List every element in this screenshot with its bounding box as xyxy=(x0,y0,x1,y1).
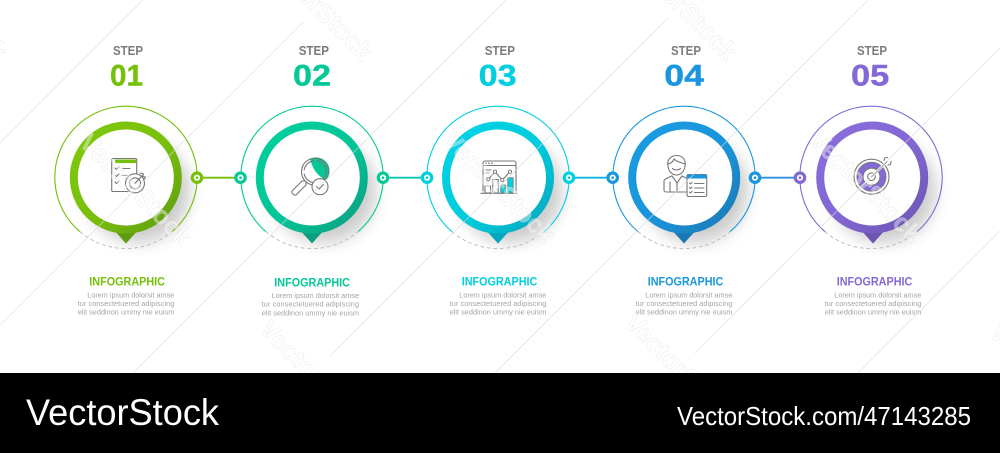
step 2 outer arc xyxy=(241,106,383,232)
step 4 dashed arc xyxy=(638,232,730,249)
step 5 number: 05 xyxy=(851,60,889,92)
step 2 number: 02 xyxy=(293,60,331,92)
step 3 outer arc xyxy=(427,106,569,232)
step 4 body text: tur consectetuered adipiscing xyxy=(636,299,732,308)
step 5 label: STEP xyxy=(857,43,887,58)
step 2 body text: tur consectetuered adipiscing xyxy=(262,300,359,309)
icon: target with arrow xyxy=(854,158,891,194)
step 4 pointer xyxy=(671,229,697,244)
footer band xyxy=(0,373,1000,453)
step 2 disc xyxy=(260,126,364,230)
step 3 pointer xyxy=(485,229,511,244)
step 2 pointer xyxy=(299,229,325,244)
footer logo text: VectorStock xyxy=(26,392,219,433)
panel: step 1 xyxy=(55,43,197,317)
step 3 disc xyxy=(446,126,550,230)
step 3 body text: Lorem ipsum dolorsit amse xyxy=(459,290,546,300)
step 5 shadow xyxy=(832,139,936,243)
step 4 outer arc xyxy=(613,106,755,232)
step 1 label: STEP xyxy=(113,43,143,58)
step 3 dashed arc xyxy=(452,232,544,249)
step 1 heading: INFOGRAPHIC xyxy=(89,277,165,289)
step 4 label: STEP xyxy=(671,43,701,58)
step 2 body text xyxy=(262,291,359,317)
step 5 dashed arc xyxy=(825,232,917,249)
watermark text: VectorStock xyxy=(619,307,744,432)
step 3 body text: tur consectetuered adipiscing xyxy=(450,299,546,308)
step 2 shadow xyxy=(272,139,376,243)
step 5 body text: elit seddinon ummy nie euism xyxy=(825,308,921,317)
step 2 body text: Lorem ipsum dolorsit amse xyxy=(272,291,359,300)
step 3 heading: INFOGRAPHIC xyxy=(462,277,537,289)
step 1 body text: Lorem ipsum dolorsit amse xyxy=(87,290,174,300)
step 4 number: 04 xyxy=(664,60,704,92)
step 4 body text: Lorem ipsum dolorsit amse xyxy=(645,290,732,300)
step 1 number: 01 xyxy=(110,60,143,92)
step 3 body text: elit seddinon ummy nie euism xyxy=(450,308,546,317)
step 5 body text xyxy=(825,290,921,317)
panel: step 5 xyxy=(800,43,942,317)
step 4 heading: INFOGRAPHIC xyxy=(648,277,723,289)
icon: businessman with checklist xyxy=(664,156,707,196)
connector: 3 to 4 xyxy=(564,173,617,182)
step 1 disc xyxy=(74,126,178,230)
step 3 body text xyxy=(450,290,546,317)
step 5 disc xyxy=(820,126,924,230)
connector: 1 to 2 xyxy=(192,173,245,182)
step 3 label: STEP xyxy=(485,43,515,58)
step 3 shadow xyxy=(458,139,562,243)
icon: magnifier with check xyxy=(292,157,330,195)
icon: analytics window xyxy=(481,161,517,193)
connector: 4 to 5 xyxy=(750,173,805,182)
step 2 label: STEP xyxy=(299,43,329,58)
step 4 body text: elit seddinon ummy nie euism xyxy=(636,308,732,317)
footer url text: VectorStock.com/47143285 xyxy=(677,401,971,431)
watermark text: VectorStock xyxy=(804,124,929,249)
watermark text: VectorStock xyxy=(74,127,199,252)
panel: step 4 xyxy=(613,43,755,317)
watermark text: VectorStock xyxy=(254,314,379,439)
step 5 pointer xyxy=(860,229,886,244)
step 4 shadow xyxy=(644,139,748,243)
step 5 body text: tur consectetuered adipiscing xyxy=(825,299,921,308)
connector: 2 to 3 xyxy=(378,173,432,182)
step 1 shadow xyxy=(86,139,190,243)
step 1 pointer xyxy=(113,229,139,244)
step 4 body text xyxy=(636,290,732,317)
step 1 body text: elit seddinon ummy nie euism xyxy=(78,308,174,317)
icon: checklist and target xyxy=(112,158,146,193)
step 1 outer arc xyxy=(55,106,197,232)
panel: step 2 xyxy=(241,43,383,317)
panel: step 3 xyxy=(427,43,569,317)
step 1 dashed arc xyxy=(80,232,172,249)
step 1 body text: tur consectetuered adipiscing xyxy=(78,299,174,308)
step 5 outer arc xyxy=(800,106,942,232)
step 2 dashed arc xyxy=(266,232,358,249)
step 3 number: 03 xyxy=(479,60,517,92)
step 5 heading: INFOGRAPHIC xyxy=(837,277,912,289)
step 5 body text: Lorem ipsum dolorsit amse xyxy=(834,290,921,300)
step 2 heading: INFOGRAPHIC xyxy=(274,277,350,289)
step 2 body text: elit seddinon ummy nie euism xyxy=(262,308,359,317)
watermark text: VectorStock xyxy=(437,125,562,250)
step 4 disc xyxy=(632,126,736,230)
step 1 body text xyxy=(78,290,174,317)
